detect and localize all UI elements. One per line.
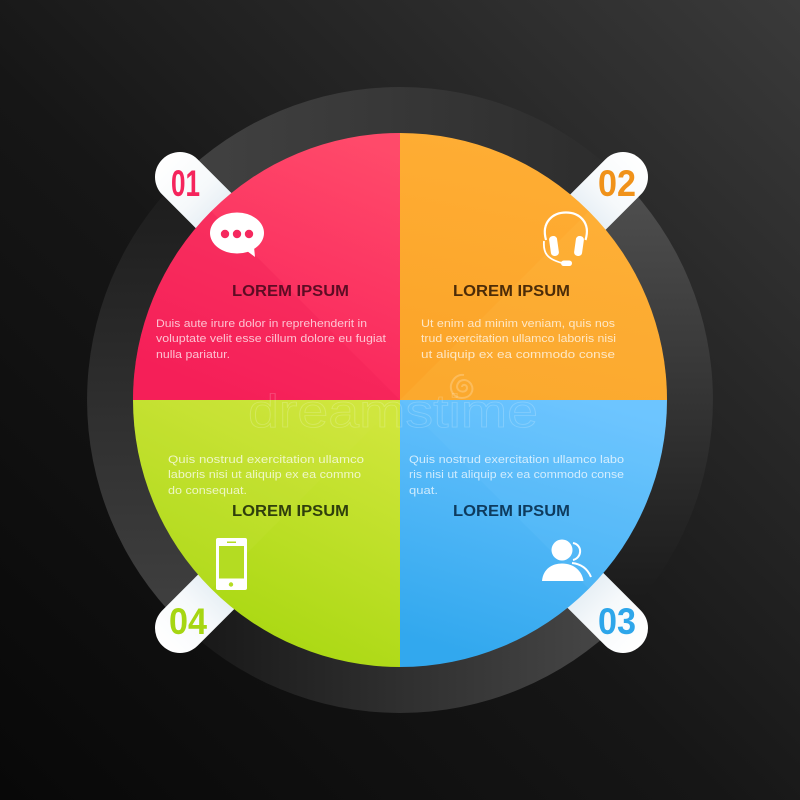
tab 03 backing xyxy=(545,550,658,663)
heading: pink: LOREM IPSUM xyxy=(232,283,349,300)
text block: green xyxy=(168,454,364,497)
text block: green: Quis nostrud exercitation ullamco xyxy=(168,454,364,466)
text block: orange xyxy=(421,318,616,361)
quadrant: pink xyxy=(133,133,400,400)
text block: pink: nulla pariatur. xyxy=(156,349,230,361)
text block: orange: ut aliquip ex ea commodo conse xyxy=(421,349,615,361)
tab 02 backing xyxy=(545,142,658,255)
icon: headset xyxy=(544,212,587,266)
watermark xyxy=(248,375,538,437)
text block: green: laboris nisi ut aliquip ex ea commo xyxy=(168,469,361,481)
tab 04 backing xyxy=(145,550,258,663)
icon: chat bubble xyxy=(210,212,264,257)
text block: pink: Duis aute irure dolor in reprehenderit in xyxy=(156,318,367,330)
tab 01 backing xyxy=(145,142,258,255)
text block: pink: voluptate velit esse cillum dolore eu fugiat xyxy=(156,333,386,345)
text block: green: do consequat. xyxy=(168,485,247,497)
number 02: 02 xyxy=(598,163,636,204)
heading: green: LOREM IPSUM xyxy=(232,503,349,520)
text block: pink xyxy=(156,318,386,361)
icon: people xyxy=(542,540,591,581)
pie disc xyxy=(133,133,667,667)
text block: blue xyxy=(409,454,624,497)
text block: blue: ris nisi ut aliquip ex ea commodo conse xyxy=(409,469,624,481)
outer ring xyxy=(87,87,713,713)
text block: blue: quat. xyxy=(409,485,438,497)
text block: orange: trud exercitation ullamco laboris nisi xyxy=(421,333,616,345)
watermark: dreamstime xyxy=(248,385,538,437)
heading: orange: LOREM IPSUM xyxy=(453,283,570,300)
text block: orange: Ut enim ad minim veniam, quis nos xyxy=(421,318,616,330)
quadrant: orange xyxy=(400,133,667,400)
number 01: 01 xyxy=(171,163,200,204)
heading: blue: LOREM IPSUM xyxy=(453,503,570,520)
number 04: 04 xyxy=(169,601,207,642)
quadrant: blue xyxy=(400,400,667,667)
text block: blue: Quis nostrud exercitation ullamco labo xyxy=(409,454,624,466)
quadrant: green xyxy=(133,400,400,667)
icon: smartphone xyxy=(216,538,247,590)
number 03: 03 xyxy=(598,601,636,642)
